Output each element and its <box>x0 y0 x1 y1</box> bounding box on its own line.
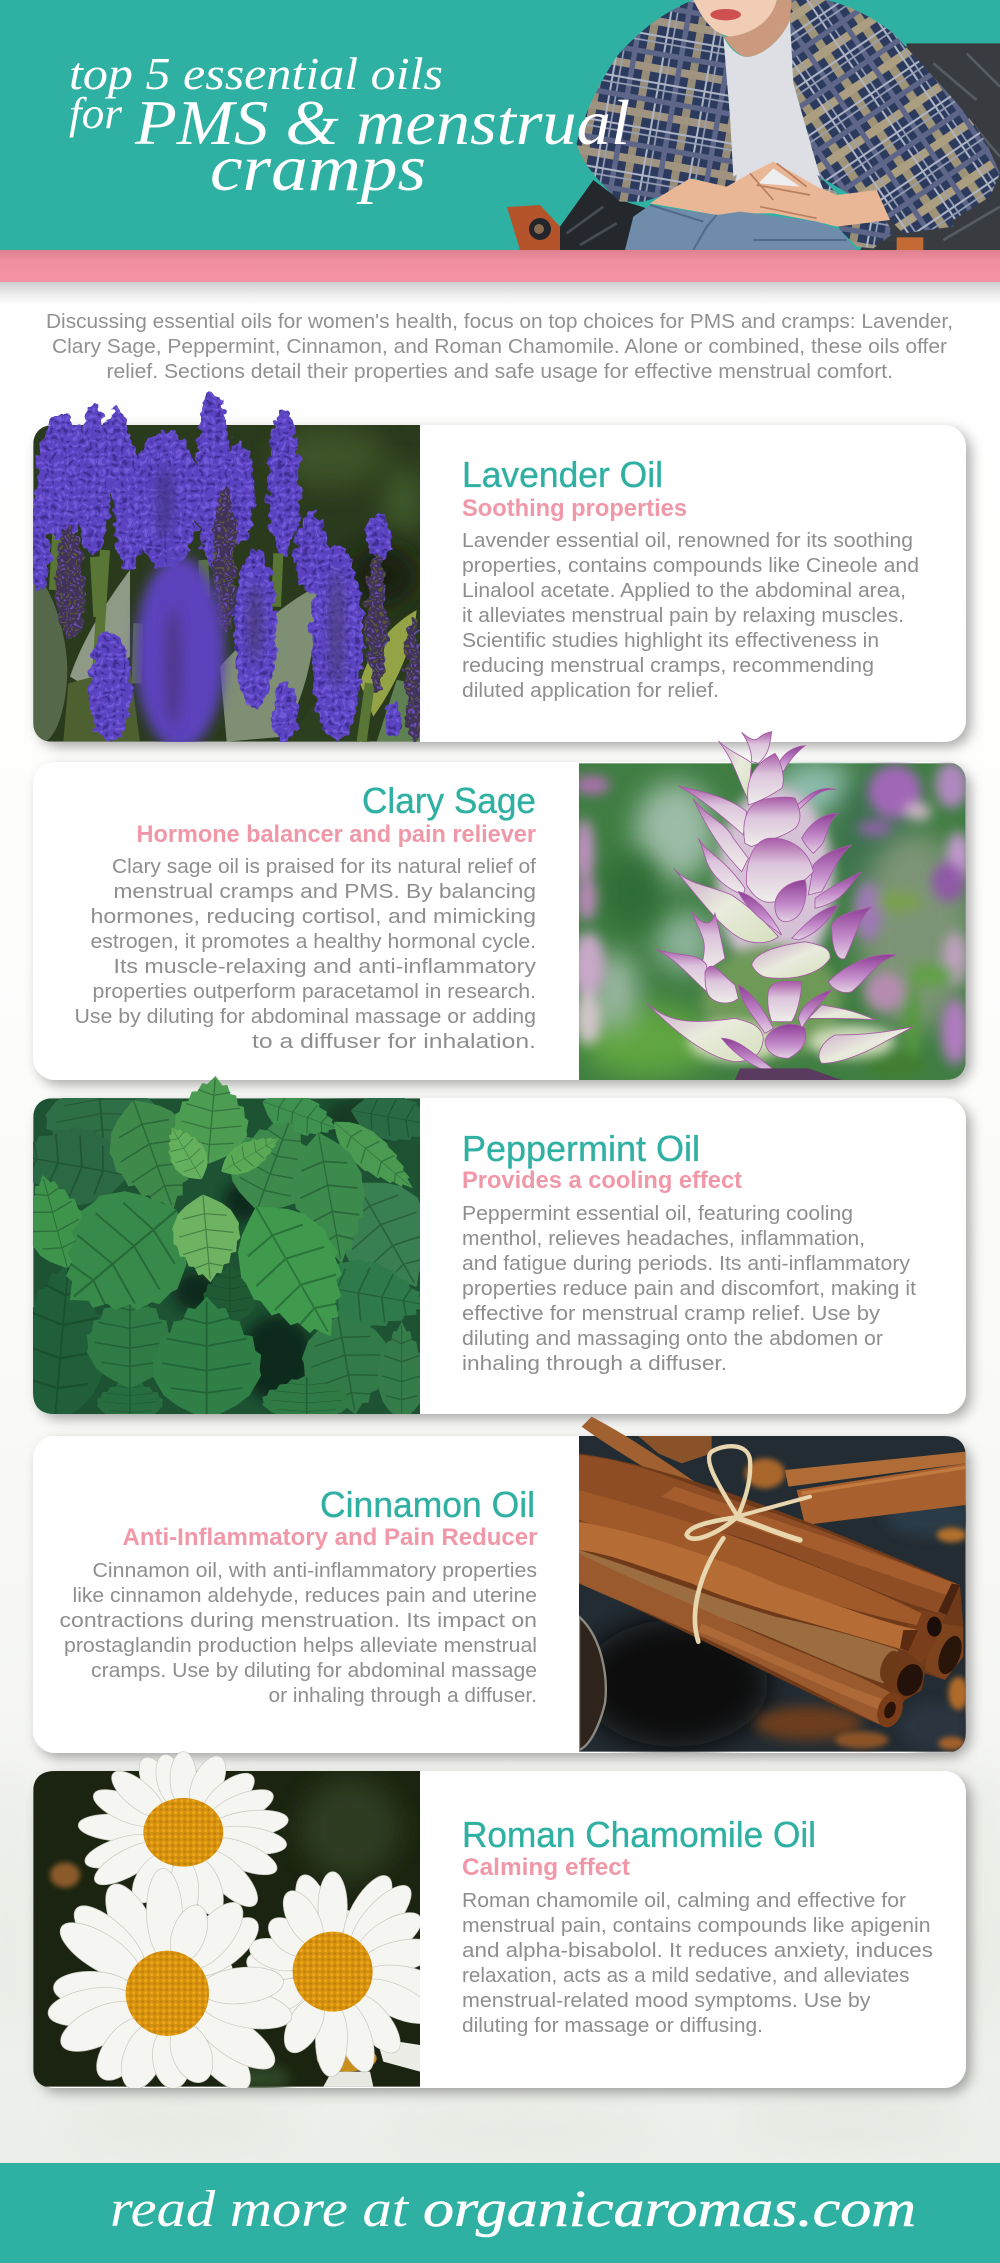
photo: peppermint leaves <box>33 1076 420 1414</box>
text: lavender oil: diluted application for relief. <box>462 680 719 702</box>
text: roman chamomile oil: and alpha-bisabolol. It reduces anxiety, induces <box>462 1940 933 1962</box>
text: peppermint oil: Peppermint Oil <box>462 1128 700 1169</box>
photo: cinnamon sticks <box>579 1417 972 1752</box>
text: cinnamon oil: Cinnamon Oil <box>320 1484 535 1525</box>
header banner <box>0 0 1000 250</box>
panel: clary sage <box>33 732 972 1080</box>
text: cinnamon oil: Anti-Inflammatory and Pain Reducer <box>122 1524 538 1551</box>
title <box>69 49 630 205</box>
text: cinnamon oil: prostaglandin production helps alleviate menstrual <box>64 1635 537 1657</box>
intro paragraph <box>46 310 953 383</box>
text: peppermint oil: effective for menstrual cramp relief. Use by <box>462 1303 880 1325</box>
text: lavender oil: Scientific studies highlight its effectiveness in <box>462 630 879 652</box>
panel: cinnamon oil <box>33 1417 972 1753</box>
text: clary sage: estrogen, it promotes a healthy hormonal cycle. <box>90 931 536 953</box>
text: clary sage: Clary sage oil is praised for its natural relief of <box>112 856 536 878</box>
text: lavender oil <box>462 454 919 702</box>
text: clary sage <box>74 780 536 1053</box>
footer call to action: read more at <box>110 2181 410 2238</box>
text: cinnamon oil <box>60 1484 538 1707</box>
text: peppermint oil: properties reduce pain and discomfort, making it <box>462 1278 916 1300</box>
text: peppermint oil <box>462 1128 916 1375</box>
title: cramps <box>210 132 426 205</box>
title: top 5 essential oils <box>69 49 443 99</box>
photo: chamomile daisies <box>33 1750 440 2100</box>
text: roman chamomile oil: Calming effect <box>462 1854 630 1881</box>
photo: clary sage <box>572 732 972 1080</box>
text: cinnamon oil: cramps. Use by diluting for abdominal massage <box>91 1660 537 1682</box>
text: lavender oil: Lavender essential oil, renowned for its soothing <box>462 530 913 552</box>
text: cinnamon oil: like cinnamon aldehyde, reduces pain and uterine <box>72 1585 537 1607</box>
text: peppermint oil: and fatigue during periods. Its anti-inflammatory <box>462 1253 910 1275</box>
text: roman chamomile oil: relaxation, acts as a mild sedative, and alleviates <box>462 1965 910 1987</box>
text: lavender oil: properties, contains compounds like Cineole and <box>462 555 919 577</box>
intro paragraph: relief. Sections detail their properties and safe usage for effective menstrual comfort. <box>106 360 893 383</box>
text: clary sage: hormones, reducing cortisol, and mimicking <box>90 906 536 928</box>
panel: lavender oil <box>29 392 966 750</box>
text: lavender oil: Soothing properties <box>462 495 687 522</box>
illustration: woman holding her abdomen on a leather chair <box>507 0 1000 250</box>
text: clary sage: Hormone balancer and pain reliever <box>136 821 536 848</box>
footer call to action <box>110 2181 916 2238</box>
text: cinnamon oil: Cinnamon oil, with anti-inflammatory properties <box>92 1560 537 1582</box>
text: lavender oil: Linalool acetate. Applied to the abdominal area, <box>462 580 906 602</box>
panel: roman chamomile oil <box>33 1750 966 2100</box>
text: cinnamon oil: contractions during menstruation. Its impact on <box>60 1610 537 1632</box>
text: clary sage: Its muscle-relaxing and anti-inflammatory <box>114 956 536 978</box>
intro paragraph: Discussing essential oils for women's health, focus on top choices for PMS and cramps: Lavender, <box>46 310 953 333</box>
text: cinnamon oil: or inhaling through a diffuser. <box>268 1685 537 1707</box>
text: clary sage: menstrual cramps and PMS. By balancing <box>114 881 536 903</box>
title: for <box>69 89 123 138</box>
text: roman chamomile oil: Roman Chamomile Oil <box>462 1814 816 1855</box>
text: peppermint oil: inhaling through a diffuser. <box>462 1353 727 1375</box>
text: peppermint oil: Provides a cooling effect <box>462 1167 742 1194</box>
text: roman chamomile oil <box>462 1814 933 2037</box>
text: lavender oil: reducing menstrual cramps, recommending <box>462 655 874 677</box>
photo: lavender <box>29 392 423 750</box>
text: roman chamomile oil: diluting for massage or diffusing. <box>462 2015 763 2037</box>
text: roman chamomile oil: menstrual pain, contains compounds like apigenin <box>462 1915 930 1937</box>
text: clary sage: Use by diluting for abdominal massage or adding <box>74 1006 536 1028</box>
pink band <box>0 250 1000 306</box>
text: peppermint oil: menthol, relieves headaches, inflammation, <box>462 1228 865 1250</box>
text: peppermint oil: diluting and massaging onto the abdomen or <box>462 1328 883 1350</box>
text: clary sage: properties outperform paracetamol in research. <box>92 981 536 1003</box>
title: PMS & menstrual <box>134 88 630 158</box>
intro paragraph: Clary Sage, Peppermint, Cinnamon, and Roman Chamomile. Alone or combined, these oils offer <box>52 335 947 358</box>
text: roman chamomile oil: Roman chamomile oil, calming and effective for <box>462 1890 906 1912</box>
text: clary sage: to a diffuser for inhalation. <box>252 1031 536 1053</box>
text: lavender oil: Lavender Oil <box>462 454 663 495</box>
text: lavender oil: it alleviates menstrual pain by relaxing muscles. <box>462 605 904 627</box>
footer banner <box>0 2163 1000 2263</box>
text: roman chamomile oil: menstrual-related mood symptoms. Use by <box>462 1990 870 2012</box>
panel: peppermint oil <box>4 1073 966 1429</box>
footer call to action: organicaromas.com <box>423 2181 916 2238</box>
text: clary sage: Clary Sage <box>362 780 536 821</box>
text: peppermint oil: Peppermint essential oil, featuring cooling <box>462 1203 853 1225</box>
